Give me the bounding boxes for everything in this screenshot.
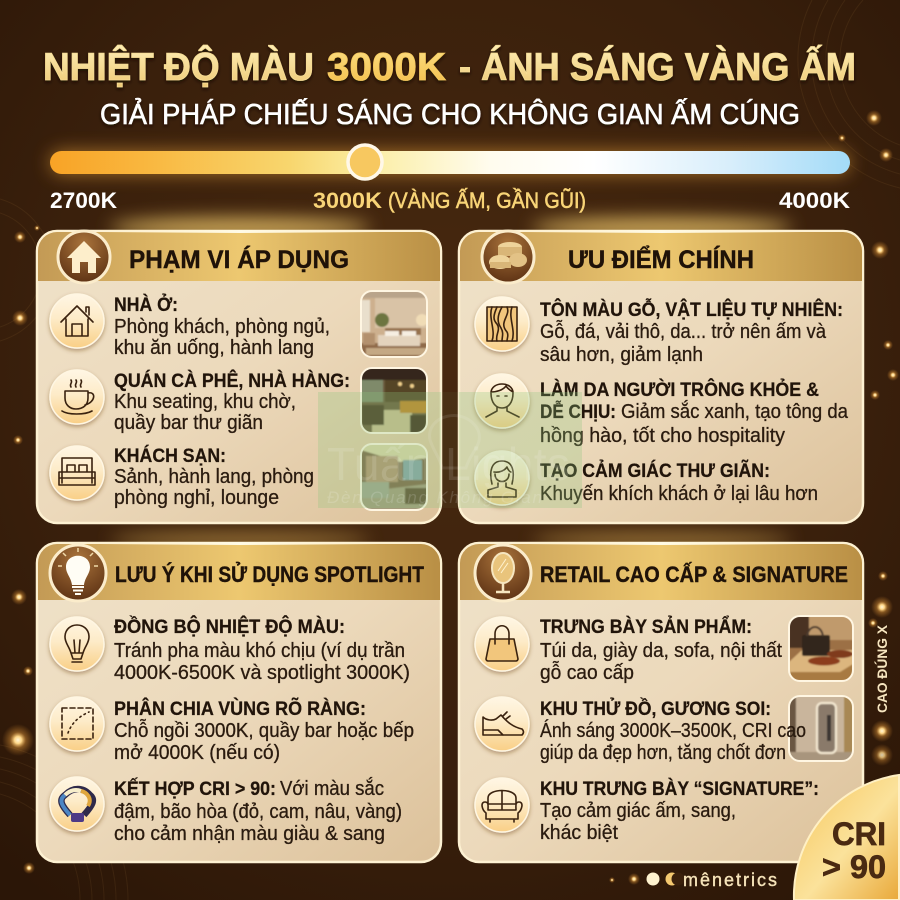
title [43,44,856,89]
item: khách sạn: phòng nghỉ, lounge [114,487,279,509]
item: khách sạn: KHÁCH SẠN: [114,445,226,467]
badge: CRI > 90: CRI [832,816,886,852]
text: khu thử đồ [540,719,806,764]
photo: bedroom [361,291,428,357]
item: quán cà phê: quầy bar thư giãn [114,412,263,434]
header icon: bulb [50,545,106,601]
heading: ƯU ĐIỂM CHÍNH [568,245,754,274]
header icon: house [58,231,110,283]
title: - ÁNH SÁNG VÀNG ẤM [459,45,856,89]
item: khu thử đồ: KHU THỬ ĐỒ, GƯƠNG SOI: [540,698,771,720]
label 3000K [313,188,586,213]
item: phân chia: Chỗ ngồi 3000K, quầy bar hoặc bếp [114,719,414,742]
photo: mirror [789,696,853,761]
item: làm da: Giảm sắc xanh, tạo tông da [621,400,849,423]
item: tạo cảm giác: TẠO CẢM GIÁC THƯ GIÃN: [540,460,770,482]
item: khu thử đồ [475,697,771,751]
item: phân chia: PHÂN CHIA VÙNG RÕ RÀNG: [114,698,366,720]
watermark: Tuấn Lights [327,438,570,490]
item: nhà ở: khu ăn uống, hành lang [114,337,314,359]
item: kết hợp CRI: KẾT HỢP CRI > 90: [114,778,276,800]
title: 3000K [327,46,446,89]
heading: LƯU Ý KHI SỬ DỤNG SPOTLIGHT [115,562,424,587]
badge: CRI > 90: > 90 [822,849,886,885]
item: khách sạn: Sảnh, hành lang, phòng [114,466,314,488]
item: đồng bộ: 4000K-6500K và spotlight 3000K) [114,662,410,684]
label 3000K: 3000K [313,188,382,213]
item: khu signature [475,778,819,844]
item: đồng bộ: ĐỒNG BỘ NHIỆT ĐỘ MÀU: [114,616,345,638]
item: quán cà phê: Khu seating, khu chờ, [114,391,296,413]
photo: shoes and bag [789,616,853,681]
watermark [318,392,582,508]
scale bar [50,151,850,174]
item: quán cà phê: QUÁN CÀ PHÊ, NHÀ HÀNG: [114,370,350,392]
watermark: Đèn Quang Không Gian [327,488,542,507]
item: nhà ở: Phòng khách, phòng ngủ, [114,316,330,338]
item: tôn màu gỗ: Gỗ, đá, vải thô, da... trở nên ấm và [540,320,827,343]
item: tôn màu gỗ: sâu hơn, giảm lạnh [540,344,703,366]
item: làm da [475,374,849,447]
logo: menetrics [609,870,777,890]
heading: RETAIL CAO CẤP & SIGNATURE [540,562,848,587]
text: khu thử đồ: Ánh sáng 3000K–3500K, CRI cao [540,719,806,742]
item: trưng bày sản phẩm: Túi da, giày da, sofa, nội thất [540,640,782,662]
label 3000K: (VÀNG ẤM, GẦN GŨI) [388,188,586,213]
item: kết hợp CRI: đậm, bão hòa (đỏ, cam, nâu, vàng) [114,801,402,823]
item: khu signature: khác biệt [540,822,618,844]
text: khu thử đồ: giúp da đẹp hơn, tăng chốt đơn [540,742,786,764]
label 4000K: 4000K [779,188,850,213]
panel: lưu ý spotlight [37,542,441,862]
item: kết hợp CRI: cho cảm nhận màu giàu & sang [114,823,385,845]
side vertical label: CAO ĐÚNG X [873,624,890,713]
item: tôn màu gỗ [475,297,843,366]
header icon: mirror [475,545,531,601]
temperature scale [50,145,850,213]
item: trưng bày sản phẩm [475,616,782,684]
item: trưng bày sản phẩm: TRƯNG BÀY SẢN PHẨM: [540,616,752,638]
panel: phạm vi áp dụng [37,230,441,523]
scale marker [348,145,382,179]
item: làm da: LÀM DA NGƯỜI TRÔNG KHỎE & [540,379,819,401]
photo: cafe [361,368,427,433]
item: tạo cảm giác: Khuyến khích khách ở lại lâu hơn [540,483,818,505]
item: nhà ở: NHÀ Ở: [114,294,178,316]
item: phân chia [50,697,414,764]
item: khu signature: KHU TRƯNG BÀY “SIGNATURE”: [540,778,819,800]
item: đồng bộ [50,616,410,684]
item: đồng bộ: Tránh pha màu khó chịu (ví dụ trần [114,640,405,662]
item: làm da: hồng hào, tốt cho hospitality [540,425,785,447]
subtitle: GIẢI PHÁP CHIẾU SÁNG CHO KHÔNG GIAN ẤM CÚNG [100,97,800,131]
heading: PHẠM VI ÁP DỤNG [129,245,349,274]
item: làm da: DỄ CHỊU: [540,401,616,423]
logo: menetrics: mênetrics [683,870,777,890]
photo: hotel [361,444,427,510]
badge: CRI > 90 [794,775,899,900]
item: khu signature: Tạo cảm giác ấm, sang, [540,800,736,822]
header icon: coins [482,231,534,283]
item: khách sạn [50,445,314,509]
panel: ưu điểm chính [459,230,863,523]
item: tạo cảm giác [475,451,818,505]
item: kết hợp CRI [50,777,402,845]
item: kết hợp CRI: Với màu sắc [280,777,384,800]
item: quán cà phê [50,370,350,434]
panel: retail cao cấp [459,542,863,862]
label 2700K: 2700K [50,188,117,213]
item: nhà ở [50,294,330,359]
item: tôn màu gỗ: TÔN MÀU GỖ, VẬT LIỆU TỰ NHIÊN: [540,299,843,321]
item: phân chia: mở 4000K (nếu có) [114,742,280,764]
title: NHIỆT ĐỘ MÀU [43,44,314,89]
item: trưng bày sản phẩm: gỗ cao cấp [540,661,634,684]
